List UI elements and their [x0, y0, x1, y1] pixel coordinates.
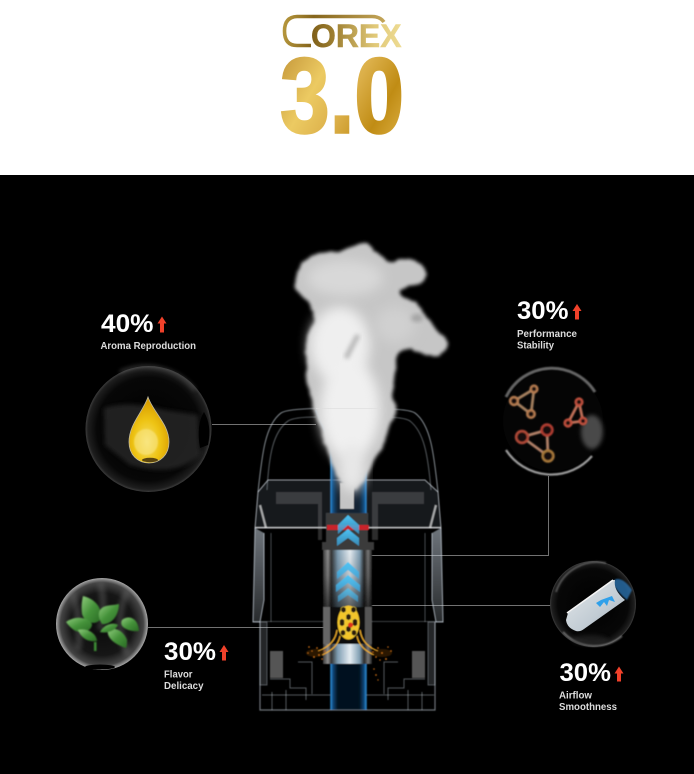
stat: aroma reproduction — [100, 310, 196, 352]
stat: performance stability — [517, 297, 582, 352]
metal atomizer tube — [322, 483, 374, 664]
stat: flavor delicacy: Delicacy — [164, 681, 204, 692]
pod shoulder block — [255, 480, 441, 540]
stat: airflow smoothness: Smoothness — [559, 702, 617, 713]
pod main body — [253, 528, 443, 710]
sphere: green leaves — [56, 578, 148, 670]
logo: COREX 3.0: 3.0 — [280, 36, 404, 156]
heating coil mesh — [318, 606, 378, 655]
connector lines — [148, 424, 551, 628]
molecule bonds — [514, 389, 583, 456]
logo: COREX 3.0: OREX — [311, 18, 402, 54]
stat: performance stability: 30% — [517, 297, 568, 325]
sphere: molecules — [503, 368, 603, 475]
stat: performance stability: Stability — [517, 340, 554, 352]
stat: airflow smoothness: Airflow — [559, 690, 592, 702]
stat: performance stability: Performance — [517, 329, 577, 340]
device: transparent pod cutaway — [253, 408, 443, 710]
stat: aroma reproduction: Aroma Reproduction — [100, 341, 196, 352]
pod upper shell — [258, 408, 438, 492]
sphere: oil drop — [86, 366, 212, 492]
pod base details — [262, 651, 434, 710]
black panel — [0, 175, 694, 774]
stat: flavor delicacy — [164, 638, 228, 692]
stat: aroma reproduction: 40% — [101, 310, 154, 338]
blue air channel and funnel — [316, 410, 381, 710]
stat: flavor delicacy: 30% — [164, 638, 216, 666]
stat: airflow smoothness — [559, 659, 624, 713]
sphere: airflow pipe — [550, 561, 636, 647]
smoke plume — [297, 245, 446, 492]
stat: flavor delicacy: Flavor — [164, 670, 193, 680]
stat: airflow smoothness: 30% — [560, 659, 611, 687]
molecule nodes — [510, 386, 586, 462]
leaves — [66, 596, 139, 651]
heat sparks — [306, 646, 392, 681]
airflow chevrons — [336, 515, 360, 602]
